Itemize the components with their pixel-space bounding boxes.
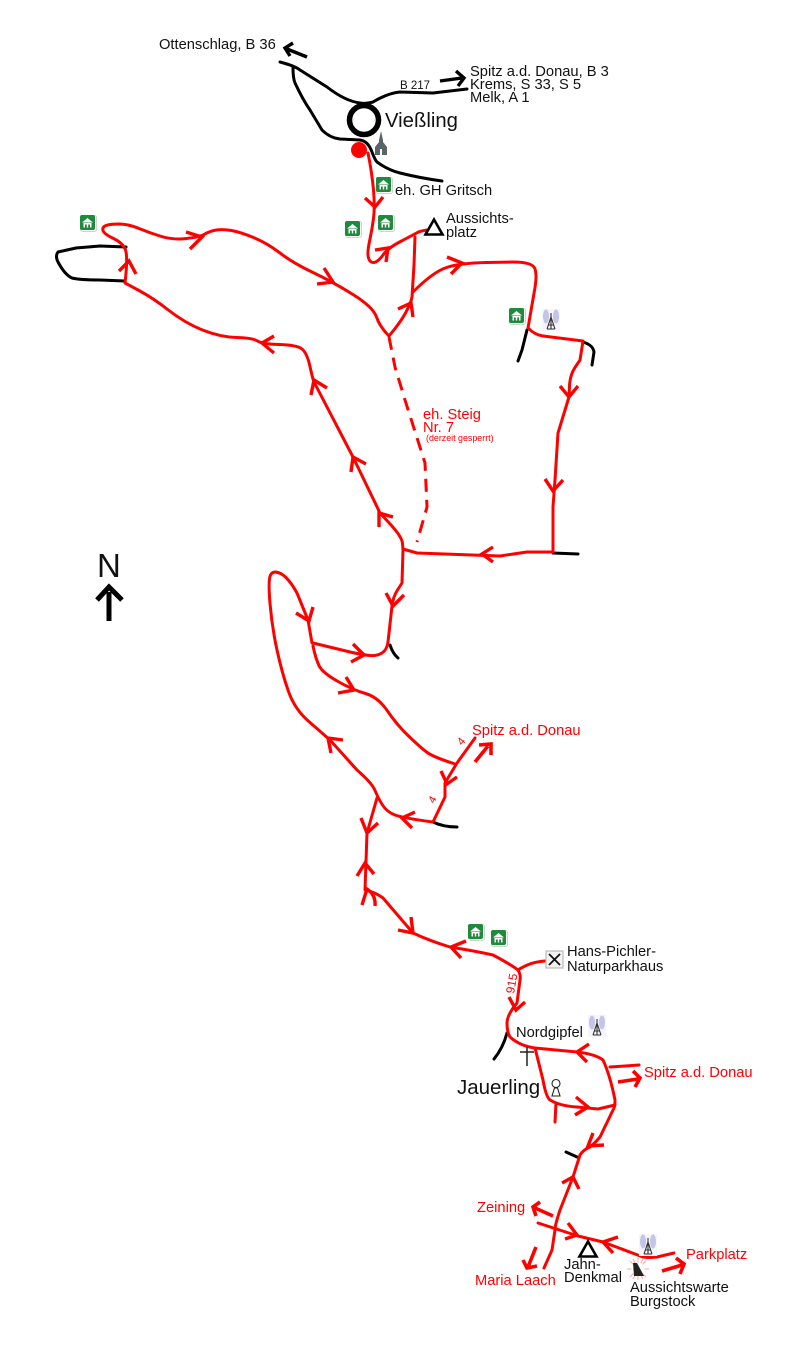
label: Jahn-Denkmal <box>564 1257 622 1286</box>
label: Zeining: Zeining <box>477 1200 525 1216</box>
label: Aussichtswarte Burgstock: Aussichtswarte <box>630 1280 729 1296</box>
exit arrow: Spitz a.d. Donau north <box>475 744 491 762</box>
label: eh. GH Gritsch: eh. GH Gritsch <box>395 183 492 199</box>
exit arrow: Parkplatz <box>662 1258 684 1274</box>
arrowhead 16 <box>296 607 313 621</box>
label: Aussichtswarte Burgstock: Burgstock <box>630 1294 696 1310</box>
road around Vießling <box>293 68 442 181</box>
road stub east <box>518 330 527 361</box>
road stub Burgstock <box>566 1152 577 1157</box>
exit arrow: Spitz a.d. Donau south <box>618 1071 640 1087</box>
north letter: N <box>97 547 121 584</box>
trail number 915: 915 <box>503 972 520 995</box>
icon: restaurant <box>546 951 563 968</box>
road stub south <box>433 822 457 827</box>
label: eh. Steig Nr. 7: (derzeit gesperrt) <box>426 433 494 443</box>
arrowhead 29 <box>575 1097 588 1115</box>
label: Spitz a.d. Donau south: Spitz a.d. Donau <box>644 1065 753 1081</box>
arrowhead 22 <box>361 818 378 833</box>
north arrow <box>97 547 122 621</box>
label: eh. Steig Nr. 7: Nr. 7 <box>423 420 454 436</box>
red hiking routes <box>103 153 674 1268</box>
label: Aussichtsplatz <box>446 211 514 241</box>
arrowhead 10 <box>317 268 333 284</box>
route inner valley <box>313 646 455 764</box>
icon: transmitter Burgstock <box>639 1234 657 1256</box>
icon: viewpoint triangle Aussichtsplatz <box>426 220 442 234</box>
label: Krems: Krems, S 33, S 5 <box>470 77 581 93</box>
arrowhead 1 <box>365 197 383 207</box>
arrowhead 31 <box>562 1177 579 1189</box>
icon: inn eh. GH Gritsch <box>376 177 392 194</box>
route to Parkplatz <box>538 1223 674 1258</box>
label: Spitz a.d. Donau north: Spitz a.d. Donau <box>472 723 581 739</box>
icon: keyhole summit marker <box>552 1080 560 1096</box>
road stub west loop <box>56 246 126 281</box>
north arrow shaft and head <box>97 587 122 621</box>
label: Vießling: Vießling <box>385 110 458 132</box>
label: Aussichtsplatz: Aussichts- <box>446 211 514 227</box>
icon: transmitter Nordgipfel <box>588 1015 606 1037</box>
icon: viewpoint triangle Jahn-Denkmal <box>580 1242 596 1256</box>
arrowhead 12 <box>311 380 327 395</box>
arrowhead 27 <box>509 997 525 1010</box>
route toward Jauerling <box>365 798 615 1268</box>
icon: inn north 2 <box>378 215 394 232</box>
label: Ottenschlag: Ottenschlag, B 36 <box>159 37 276 53</box>
route north central <box>103 224 415 656</box>
arrowhead 5 <box>560 386 578 397</box>
icon: inn south 1 <box>468 924 484 940</box>
road stub northeast <box>583 342 594 365</box>
label: Hans-Pichler-Naturparkhaus <box>567 944 663 975</box>
direction arrowheads <box>119 197 618 1253</box>
arrowhead 28 <box>577 1044 589 1062</box>
closed trail dashed <box>389 337 427 542</box>
label: Hans-Pichler-Naturparkhaus: Hans-Pichler- <box>567 944 656 960</box>
arrowhead 7 <box>482 547 493 562</box>
arrowhead 23 <box>357 863 374 876</box>
route west loop south <box>269 572 475 822</box>
icon: inn northwest <box>80 215 96 232</box>
icon: inn north 3 <box>345 221 362 238</box>
arrowhead 33 <box>603 1237 618 1253</box>
exit arrow: Zeining <box>533 1202 553 1216</box>
icon: summit cross <box>520 1047 534 1066</box>
icon: inn south 2 <box>491 930 508 946</box>
icon: transmitter east <box>542 309 560 331</box>
summit stub <box>555 1103 556 1122</box>
icon: lookout tower Burgstock <box>627 1258 649 1280</box>
black access roads <box>56 62 594 1157</box>
label: eh. Steig Nr. 7 <box>423 407 494 443</box>
branch to Spitz a.d. Donau <box>610 1065 639 1067</box>
arrowhead 30 <box>588 1133 604 1146</box>
label: Aussichtsplatz: platz <box>446 225 477 241</box>
route east loop <box>403 262 583 556</box>
label: road B 217: B 217 <box>400 80 430 92</box>
arrowhead 8 <box>119 261 136 274</box>
road stub central <box>390 645 398 658</box>
branch to Naturparkhaus <box>518 961 545 970</box>
icon: inn east <box>509 308 526 324</box>
exit arrow: Maria Laach <box>523 1247 537 1268</box>
road B 217 <box>280 62 467 103</box>
arrowhead 19 <box>328 738 343 753</box>
arrowhead 15 <box>386 593 404 606</box>
label: Parkplatz: Parkplatz <box>686 1247 747 1263</box>
arrowhead 13 <box>351 457 366 472</box>
exit arrow: Spitz B 3 <box>440 71 464 86</box>
start point <box>351 142 367 158</box>
road stub at junction <box>553 553 578 554</box>
label: eh. Steig Nr. 7: eh. Steig <box>423 407 481 423</box>
arrowhead 3 <box>398 303 413 317</box>
arrowhead 25 <box>398 917 413 933</box>
label: Jahn-Denkmal: Jahn- <box>564 1257 601 1273</box>
arrowhead 32 <box>565 1223 577 1239</box>
arrowhead 21 <box>402 812 415 828</box>
label: Spitz a.d. Donau B 3: Spitz a.d. Donau, B 3 <box>470 64 609 80</box>
arrowhead 6 <box>545 479 563 491</box>
arrowhead 20 <box>441 771 457 784</box>
labels <box>159 37 753 1310</box>
trail number 4 upper: 4 <box>455 736 468 748</box>
arrowhead 18 <box>338 677 354 693</box>
arrowhead 2 <box>375 248 388 262</box>
arrowhead 14 <box>379 513 393 527</box>
arrowhead 11 <box>262 336 274 353</box>
road stub Nordgipfel <box>494 1033 507 1059</box>
label: Hans-Pichler-Naturparkhaus: Naturparkhaus <box>567 959 663 975</box>
arrowhead 24 <box>362 889 375 906</box>
label: Nordgipfel: Nordgipfel <box>516 1025 583 1041</box>
arrowhead 26 <box>451 941 466 958</box>
town marker: Vießling ring <box>350 106 378 134</box>
summit loop <box>535 1048 615 1109</box>
label: Jauerling: Jauerling <box>457 1076 540 1099</box>
label: Jahn-Denkmal: Denkmal <box>564 1270 622 1286</box>
label: Melk: Melk, A 1 <box>470 90 530 106</box>
arrowhead 17 <box>351 644 364 662</box>
label: Aussichtswarte Burgstock <box>630 1280 729 1310</box>
route from start <box>368 153 427 263</box>
trail number 4 lower: 4 <box>426 794 440 806</box>
arrowhead 9 <box>186 232 202 249</box>
label: Maria Laach: Maria Laach <box>475 1273 556 1289</box>
icon: church <box>375 131 387 155</box>
exit arrow: Ottenschlag <box>285 43 307 57</box>
arrowhead 4 <box>447 257 462 274</box>
